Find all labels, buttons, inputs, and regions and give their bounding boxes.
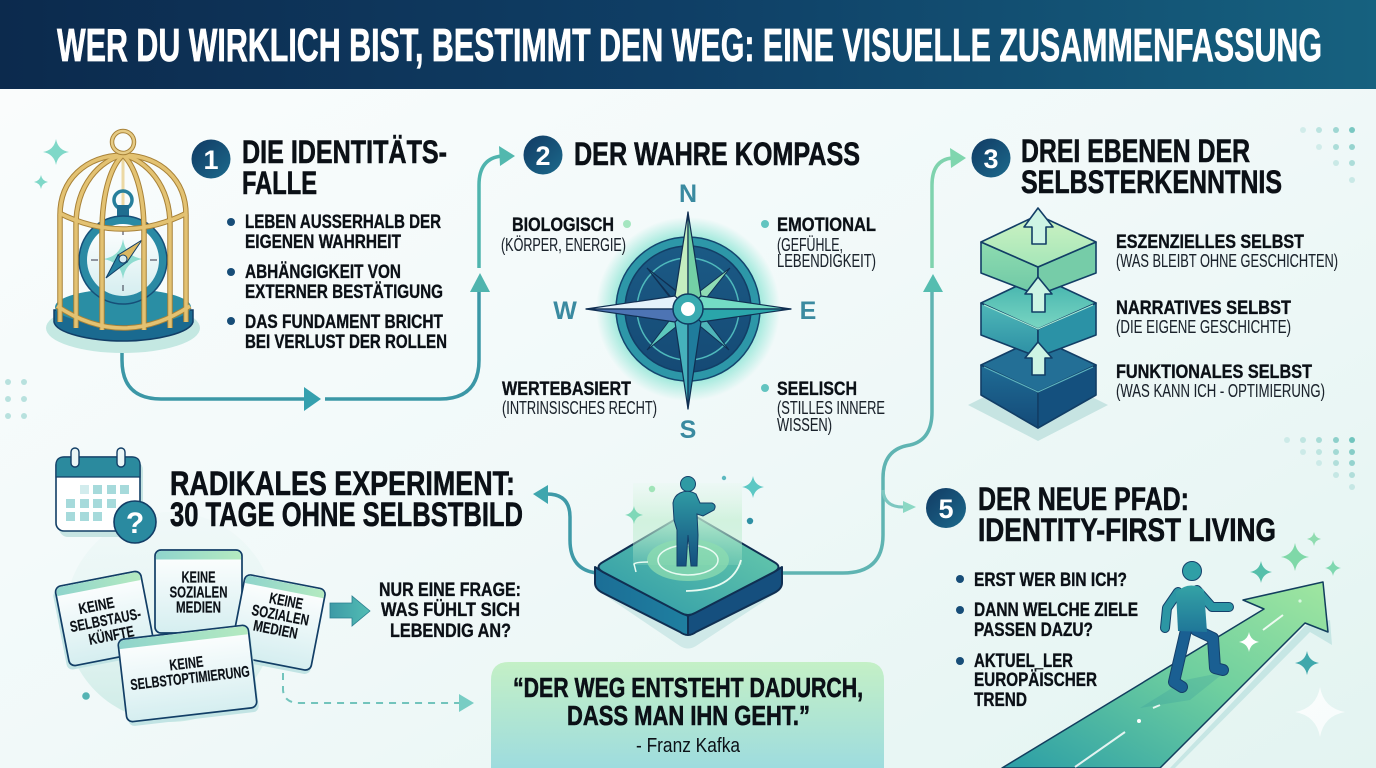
card: keine selbstauskuenfte: KEINE [77, 595, 116, 618]
cardinal letters: S [680, 416, 696, 444]
heading 3: DREI EBENEN DER [1021, 133, 1250, 169]
sparkles [1239, 532, 1345, 737]
cage bars [57, 155, 190, 330]
heading 1 [242, 134, 447, 201]
icon: compass in golden cage [34, 131, 200, 353]
section 2: der wahre kompass [501, 136, 885, 444]
bullet list 5: ERST WER BIN ICH? [974, 570, 1127, 591]
number badge 3 [972, 138, 1010, 178]
cardinal letters: E [800, 297, 816, 325]
cage base [54, 310, 193, 341]
label: funktionales selbst: FUNKTIONALES SELBST [1116, 362, 1312, 383]
card: keine sozialen medien 2 [229, 574, 326, 675]
card: keine sozialen medien: MEDIEN [176, 600, 221, 616]
arrow: platform to section three and five [780, 148, 966, 573]
number badge 1 [192, 140, 230, 178]
cardinal letters: W [553, 297, 577, 325]
question text: LEBENDIG AN? [390, 621, 511, 642]
heading 5: DER NEUE PFAD: [978, 481, 1189, 517]
heading 2: DER WAHRE KOMPASS [574, 136, 860, 172]
bullet list 5: EUROPÄISCHER [974, 670, 1097, 691]
quote text: DASS MAN IHN GEHT.” [567, 700, 810, 731]
decorative dots left [5, 379, 27, 419]
center platform with person [595, 476, 782, 648]
number badge 5: 5 [938, 494, 954, 524]
bullet list 5 [956, 570, 1138, 711]
label: eszenzielles selbst [1116, 232, 1338, 271]
platform [595, 514, 782, 635]
card backdrop [65, 512, 275, 722]
heading 4 [170, 465, 523, 534]
sparkles and dots [625, 476, 764, 524]
number badge 2: 2 [535, 141, 551, 171]
bullet list 1: DAS FUNDAMENT BRICHT [245, 312, 443, 333]
sparkles [34, 139, 69, 189]
cage back bar [122, 155, 124, 225]
hologram panel [633, 483, 742, 565]
label: emotional: LEBENDIGKEIT) [777, 251, 876, 271]
card: keine sozialen medien 2: KEINE [268, 590, 304, 613]
top layer [981, 215, 1096, 295]
header band [0, 0, 1376, 89]
arrow: cage to compass [122, 146, 515, 411]
quote text [513, 672, 863, 731]
label: seelisch: (STILLES INNERE [777, 398, 885, 418]
card: keine selbstoptimierung: SELBSTOPTIMIERUNG [130, 663, 251, 694]
bullet list 1: LEBEN AUSSERHALB DER [245, 212, 441, 233]
middle layer [981, 276, 1096, 357]
heading 1: DIE IDENTITÄTS- [242, 134, 447, 170]
decorative dots top right [1300, 127, 1355, 183]
bullet list 1: BEI VERLUST DER ROLLEN [245, 332, 447, 353]
heading 5 [978, 481, 1276, 548]
label: seelisch: SEELISCH [777, 379, 857, 400]
card: keine sozialen medien: KEINE [182, 570, 216, 586]
card: keine selbstoptimierung: KEINE [169, 654, 204, 674]
card: keine sozialen medien 2: SOZIALEN [250, 602, 310, 630]
number badge 5 [926, 488, 966, 528]
cardinal letters [553, 180, 816, 444]
floor rings [634, 539, 741, 591]
cardinal letters: N [679, 180, 697, 208]
up arrows [1024, 208, 1053, 375]
heading 3 [1021, 133, 1282, 200]
question text [379, 580, 521, 642]
card: keine sozialen medien 2: MEDIEN [252, 618, 299, 643]
label: wertebasiert: WERTEBASIERT [502, 379, 631, 400]
card: keine sozialen medien: SOZIALEN [170, 584, 228, 602]
label: narratives selbst [1116, 298, 1291, 337]
section 3: drei ebenen [968, 133, 1338, 441]
card: keine sozialen medien [155, 550, 242, 633]
label: wertebasiert: (INTRINSISCHES RECHT) [502, 398, 657, 418]
bullet list 5: TREND [974, 690, 1027, 711]
big path arrow [1002, 582, 1332, 768]
card: keine selbstauskuenfte: SELBSTAUS- [69, 606, 142, 636]
question text: WAS FÜHLT SICH [381, 600, 520, 621]
card: keine selbstauskuenfte [52, 570, 156, 671]
decorative dot [82, 692, 90, 700]
heading 4: RADIKALES EXPERIMENT: [170, 465, 515, 503]
compass [79, 191, 167, 304]
heading 1: FALLE [242, 165, 317, 201]
label: narratives selbst: NARRATIVES SELBST [1116, 298, 1291, 319]
person [673, 476, 715, 566]
label: emotional: EMOTIONAL [777, 215, 876, 236]
icon: calendar with question mark: ? [126, 507, 144, 540]
heading 3: SELBSTERKENNTNIS [1021, 164, 1282, 200]
compass rose [586, 212, 791, 409]
bullet list 5: AKTUEL_LER [974, 651, 1073, 672]
arrow: platform to experiment [533, 485, 597, 573]
number badge 1: 1 [203, 145, 219, 175]
card: keine selbstauskuenfte: KÜNFTE [87, 623, 136, 649]
dashed arrow: experiment to quote [283, 673, 474, 712]
label: biologisch: BIOLOGISCH [512, 215, 614, 236]
number badge 2 [524, 136, 562, 174]
bullet list 1 [227, 212, 447, 353]
bullet list 1: EXTERNER BESTÄTIGUNG [245, 282, 443, 303]
bullet list 1: ABHÄNGIGKEIT VON [245, 262, 401, 283]
label: seelisch [761, 379, 885, 435]
question text: NUR EINE FRAGE: [379, 580, 521, 601]
label: seelisch: WISSEN) [777, 415, 832, 435]
bullet list 5: DANN WELCHE ZIELE [974, 600, 1138, 621]
icon: calendar with question mark [56, 448, 156, 543]
heading 4: 30 TAGE OHNE SELBSTBILD [170, 496, 523, 534]
quote box [491, 662, 884, 768]
walking person [1165, 562, 1229, 687]
section 1: die identitaets-falle [192, 134, 447, 353]
label: eszenzielles selbst: ESZENZIELLES SELBST [1116, 232, 1304, 253]
block arrow [330, 596, 370, 626]
bullet list 1: EIGENEN WAHRHEIT [245, 232, 401, 253]
heading 5: IDENTITY-FIRST LIVING [978, 512, 1276, 548]
stacked layers [968, 208, 1108, 441]
number badge 3: 3 [983, 144, 999, 174]
bullet list 5: PASSEN DAZU? [974, 620, 1093, 641]
label: funktionales selbst [1116, 362, 1325, 401]
quote author: - Franz Kafka [636, 735, 741, 757]
cage ring [112, 131, 134, 153]
section 5: der neue pfad [926, 481, 1345, 768]
label: narratives selbst: (DIE EIGENE GESCHICHTE) [1116, 317, 1291, 337]
decorative dots lower right [1284, 437, 1355, 490]
bottom layer [981, 338, 1096, 428]
label: biologisch: (KÖRPER, ENERGIE) [501, 235, 626, 255]
label: emotional [761, 215, 876, 271]
label: biologisch [501, 215, 631, 255]
card: keine selbstoptimierung [118, 625, 259, 727]
cage shadow [46, 303, 200, 353]
label: wertebasiert [502, 379, 657, 418]
label: emotional: (GEFÜHLE, [777, 235, 843, 255]
section 4: radikales experiment [52, 448, 523, 727]
quote text: “DER WEG ENTSTEHT DADURCH, [513, 672, 863, 703]
